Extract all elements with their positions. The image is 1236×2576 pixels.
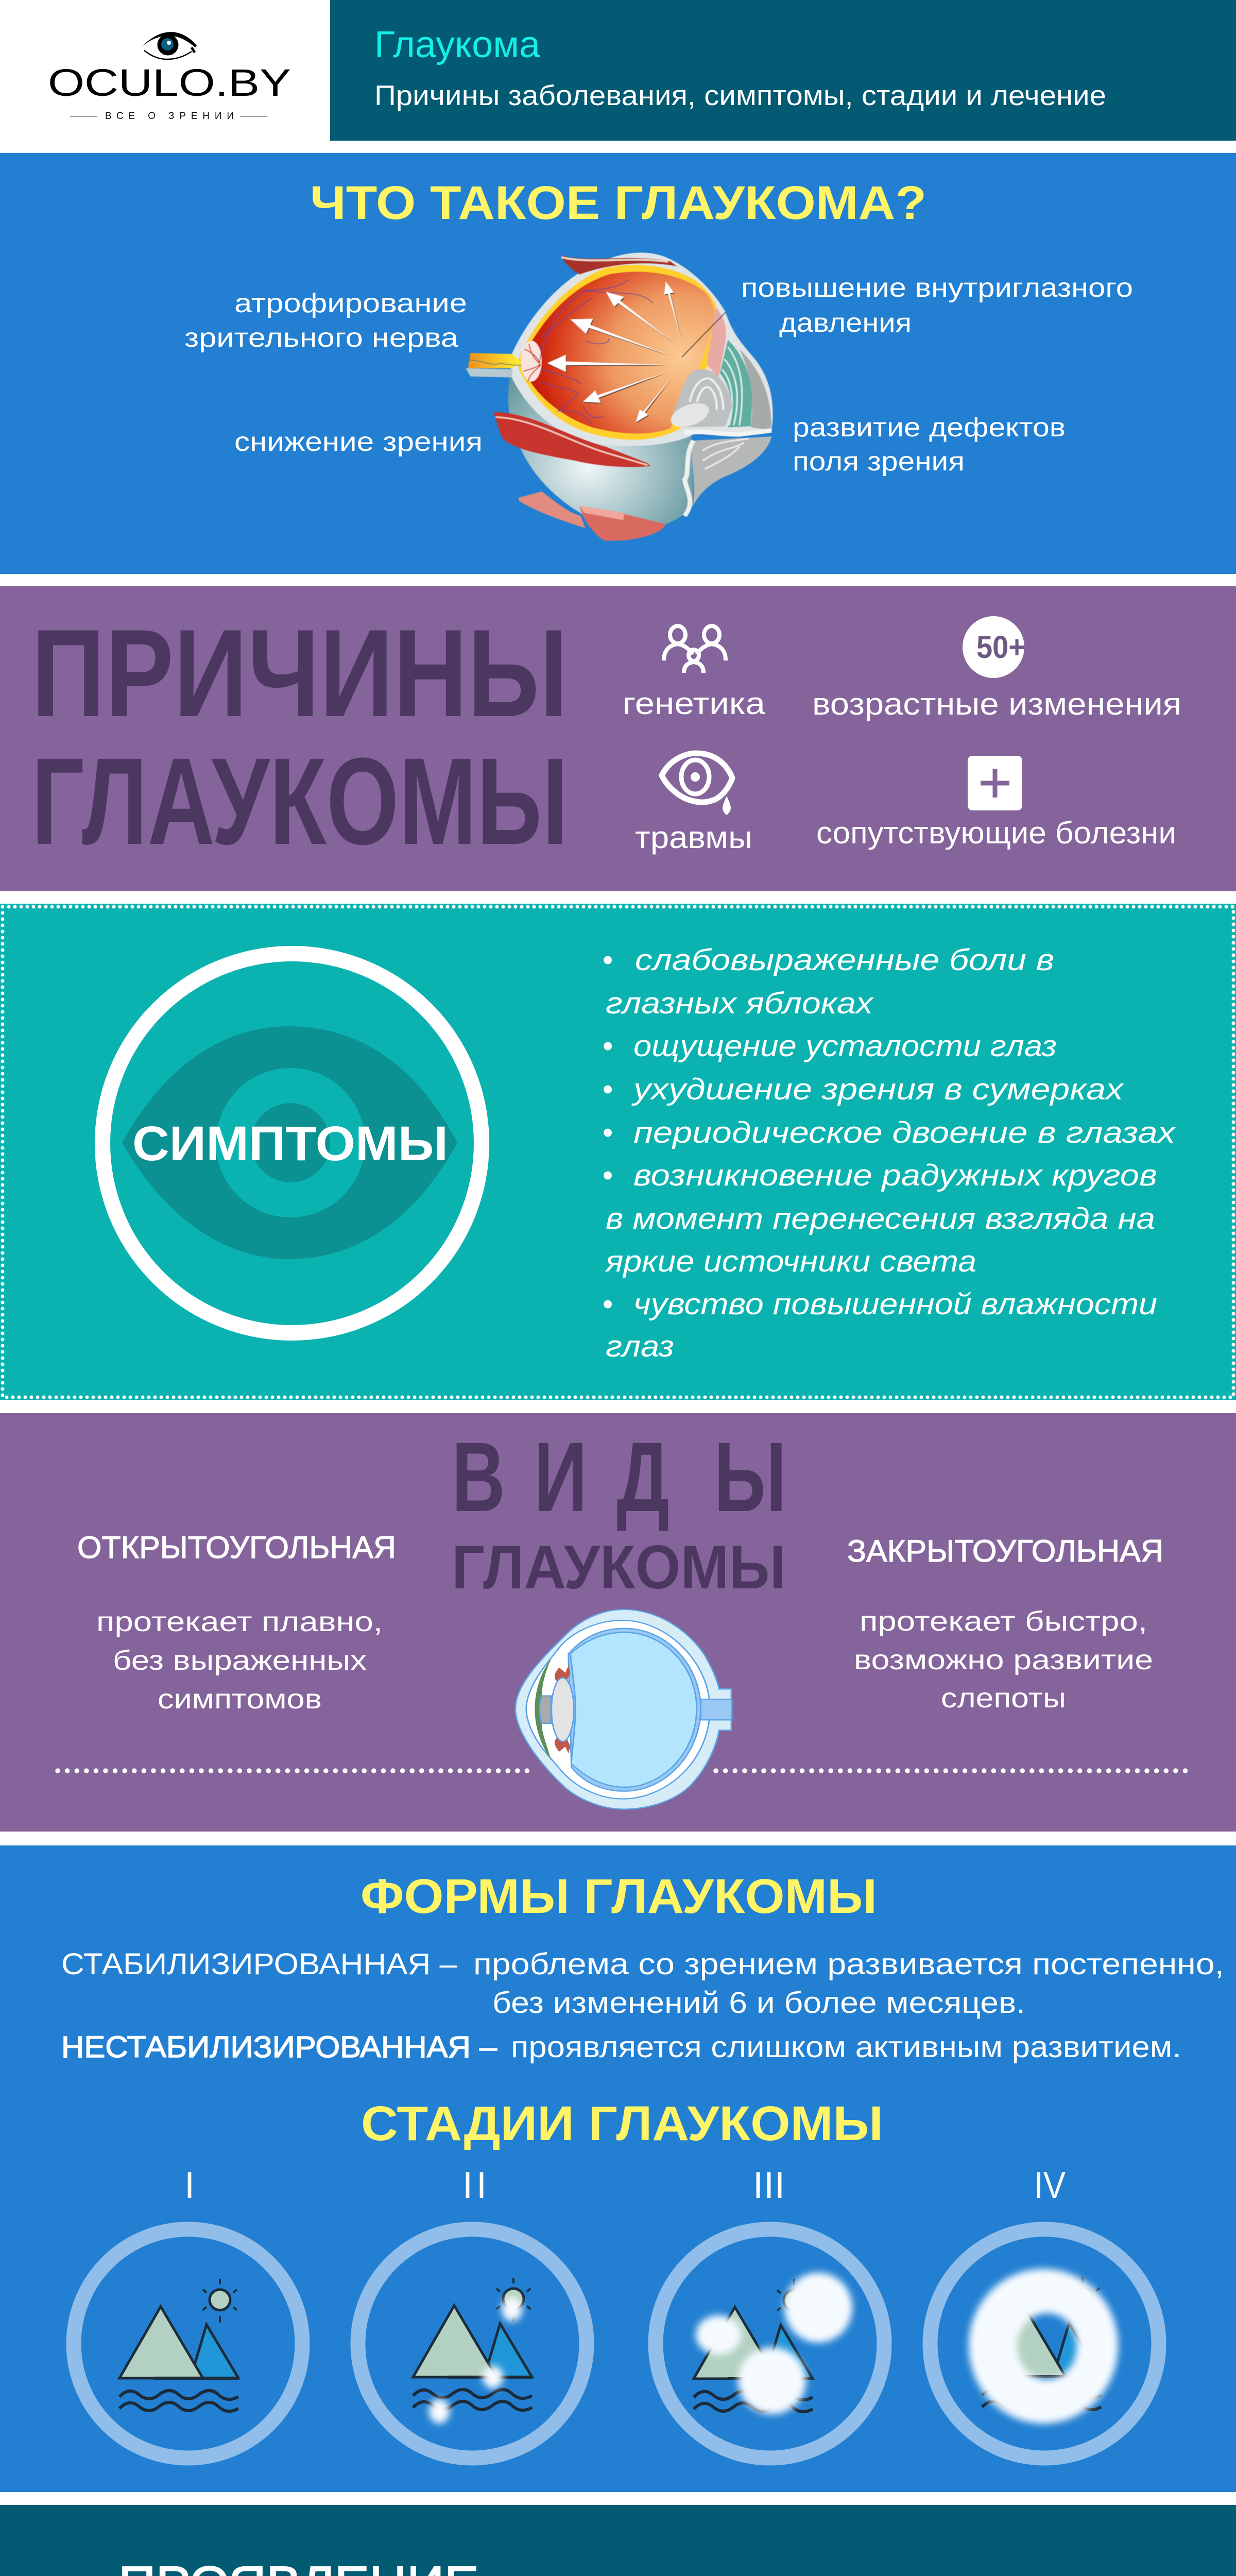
stage II [358,2165,587,2458]
heading: ГЛАУКОМЫ [31,732,568,870]
stage III [656,2165,884,2458]
icon: logo eye [142,32,197,59]
stage IV [930,2165,1159,2458]
symptom list: чувство повышенной влажности [633,1287,1157,1321]
header: logo block [0,0,330,153]
symptom list: • [603,1073,613,1106]
stage II: II [462,2165,487,2206]
symptom list: глаз [606,1330,674,1363]
heading: СИМПТОМЫ [132,1116,448,1171]
text: stabilized form [61,1947,1224,2020]
type: closed angle: протекает быстро, [860,1606,1147,1637]
type: closed angle: слепоты [941,1683,1066,1714]
text: stabilized form: проблема со зрением развивается постепенно, [473,1947,1224,1981]
label: injuries: травмы [635,820,752,855]
symptom list: • [603,1159,613,1192]
panel: types of glaucoma [0,1413,1236,1832]
icon: 50+ [963,616,1025,678]
symptom list [603,943,1176,1363]
icon: plus box [968,756,1022,810]
type: closed angle [847,1534,1163,1714]
panel: manifestation [0,2505,1236,2576]
icon: genetics [664,626,726,673]
label: optic nerve atrophy [184,289,467,353]
heading: ВИДЫ [452,1421,786,1532]
type: open angle: симптомов [158,1684,322,1715]
symptom list: в момент перенесения взгляда на [606,1202,1155,1235]
label: visual field defects: развитие дефектов [793,413,1066,443]
heading: stages: СТАДИИ ГЛАУКОМЫ [361,2096,883,2151]
symptom list: периодическое двоение в глазах [633,1116,1176,1149]
label: raised pressure: повышение внутриглазного [741,273,1133,303]
label: raised pressure [741,273,1133,338]
label: concomitant diseases: сопутствующие болезни [816,816,1176,850]
logo tagline: ВСЕ О ЗРЕНИИ [105,111,234,122]
illustration: eyeball cross-section [466,252,773,541]
header: title band [330,0,1236,141]
subtitle: Причины заболевания, симптомы, стадии и лечение [374,79,1106,111]
text: stabilized form: без изменений 6 и более месяцев. [492,1986,1025,2020]
type: open angle: протекает плавно, [96,1606,383,1637]
heading: forms: ФОРМЫ ГЛАУКОМЫ [360,1869,877,1924]
symptom list: ощущение усталости глаз [633,1029,1057,1063]
heading: ГЛАУКОМЫ [452,1533,786,1602]
logo wordmark: OCULO.BY [48,61,291,104]
heading: ПРИЧИНЫ [31,604,568,743]
type: open angle: без выраженных [113,1645,367,1676]
label: vision loss: снижение зрения [234,427,483,457]
stage I: I [184,2165,195,2206]
symptom list: • [603,1287,613,1321]
label: optic nerve atrophy: атрофирование [234,289,467,318]
label: raised pressure: давления [779,308,912,338]
type: open angle: ОТКРЫТОУГОЛЬНАЯ [77,1530,396,1565]
symptom list: • [603,943,613,977]
heading: ЧТО ТАКОЕ ГЛАУКОМА? [310,177,926,229]
panel: forms and stages [0,1845,1236,2492]
type: closed angle: ЗАКРЫТОУГОЛЬНАЯ [847,1534,1163,1568]
label: visual field defects: поля зрения [793,447,965,477]
symptom list: яркие источники света [605,1245,976,1278]
text: stabilized form: СТАБИЛИЗИРОВАННАЯ – [61,1947,458,1981]
symptom list: возникновение радужных кругов [633,1159,1157,1192]
panel: symptoms [0,904,1236,1400]
icon: eye in ring [102,954,482,1333]
symptom list: глазных яблоках [606,987,874,1020]
heading [452,1421,786,1602]
symptom list: • [603,1029,613,1063]
heading [31,604,568,870]
type: open angle [77,1530,396,1715]
stage I [74,2165,302,2458]
icon: eye with tear [662,753,732,815]
stage IV: IV [1034,2165,1066,2206]
text: unstabilized form: проявляется слишком активным развитием. [511,2030,1181,2064]
stage III: III [753,2165,785,2206]
label: visual field defects [793,413,1066,477]
symptom list: слабовыраженные боли в [635,943,1054,977]
panel: causes [0,586,1236,891]
illustration: eye diagram [516,1609,732,1809]
symptom list: ухудшение зрения в сумерках [631,1073,1124,1106]
text: unstabilized form [61,2030,1181,2064]
panel: what is glaucoma [0,153,1236,574]
symptom list: • [603,1116,613,1149]
label: optic nerve atrophy: зрительного нерва [184,323,458,353]
text: unstabilized form: НЕСТАБИЛИЗИРОВАННАЯ – [61,2030,497,2064]
label: genetics: генетика [623,686,766,721]
label: age changes: возрастные изменения [812,687,1181,721]
icon: 50+: 50+ [976,630,1025,665]
type: closed angle: возможно развитие [854,1645,1153,1675]
title: Глаукома [374,24,541,65]
